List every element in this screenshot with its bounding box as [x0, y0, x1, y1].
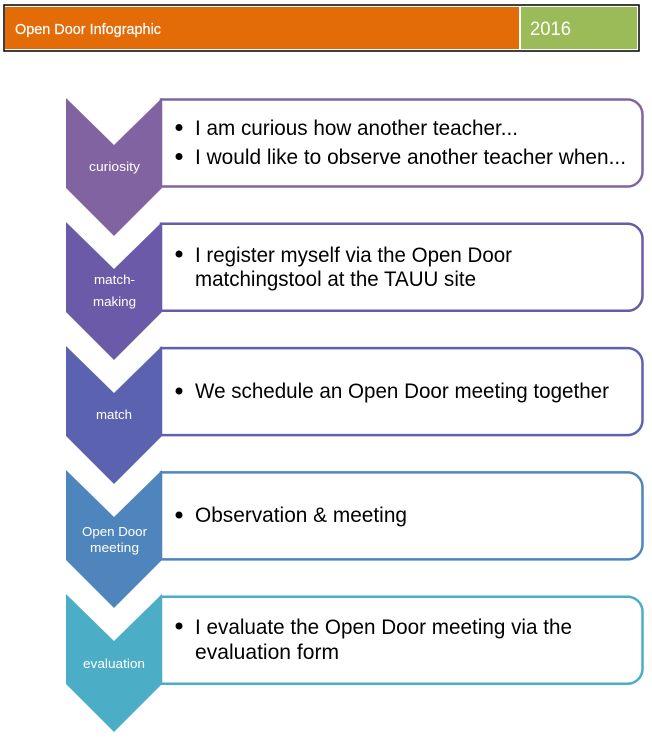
panel: Open Door meeting text: Observation & meeting	[195, 504, 407, 527]
chevron: Open Door meeting	[66, 470, 162, 608]
panel: match text: We schedule an Open Door meeting together	[195, 380, 609, 403]
step 2: match-making	[66, 222, 642, 360]
chevron: Open Door meeting: Open Door	[82, 524, 148, 539]
chevron: match-making: making	[93, 294, 136, 309]
panel: curiosity text: I would like to observe another teacher when...	[195, 146, 626, 169]
chevron: Open Door meeting: meeting	[90, 540, 139, 555]
chevron: curiosity: curiosity	[89, 159, 141, 174]
panel: match-making text: matchingstool at the TAUU site	[195, 268, 476, 291]
chevron: curiosity	[66, 98, 162, 236]
panel: match-making text	[161, 224, 642, 311]
panel: evaluation text: I evaluate the Open Door meeting via the	[195, 616, 572, 639]
chevron: match	[66, 346, 162, 484]
step 1: curiosity	[66, 98, 642, 236]
panel: match text	[161, 348, 642, 435]
panel: curiosity text	[161, 99, 642, 187]
chevron: match-making	[66, 222, 162, 360]
chevron: evaluation: evaluation	[83, 656, 145, 671]
year box	[521, 7, 637, 49]
year box: 2016	[530, 19, 571, 40]
panel: evaluation text: evaluation form	[195, 641, 339, 664]
panel: evaluation text	[161, 597, 642, 684]
panel: curiosity text: I am curious how another teacher...	[195, 117, 518, 140]
title bar	[5, 7, 519, 49]
chevron: evaluation	[66, 594, 162, 732]
header banner	[4, 5, 639, 51]
step 3: match	[66, 346, 642, 484]
title bar: Open Door Infographic	[15, 21, 161, 38]
step 5: evaluation	[66, 594, 642, 732]
step 4: Open Door meeting	[66, 470, 642, 608]
chevron: match-making: match-	[94, 272, 135, 287]
panel: Open Door meeting text	[161, 472, 642, 559]
chevron: match: match	[96, 407, 132, 422]
panel: match-making text: I register myself via the Open Door	[195, 244, 512, 267]
